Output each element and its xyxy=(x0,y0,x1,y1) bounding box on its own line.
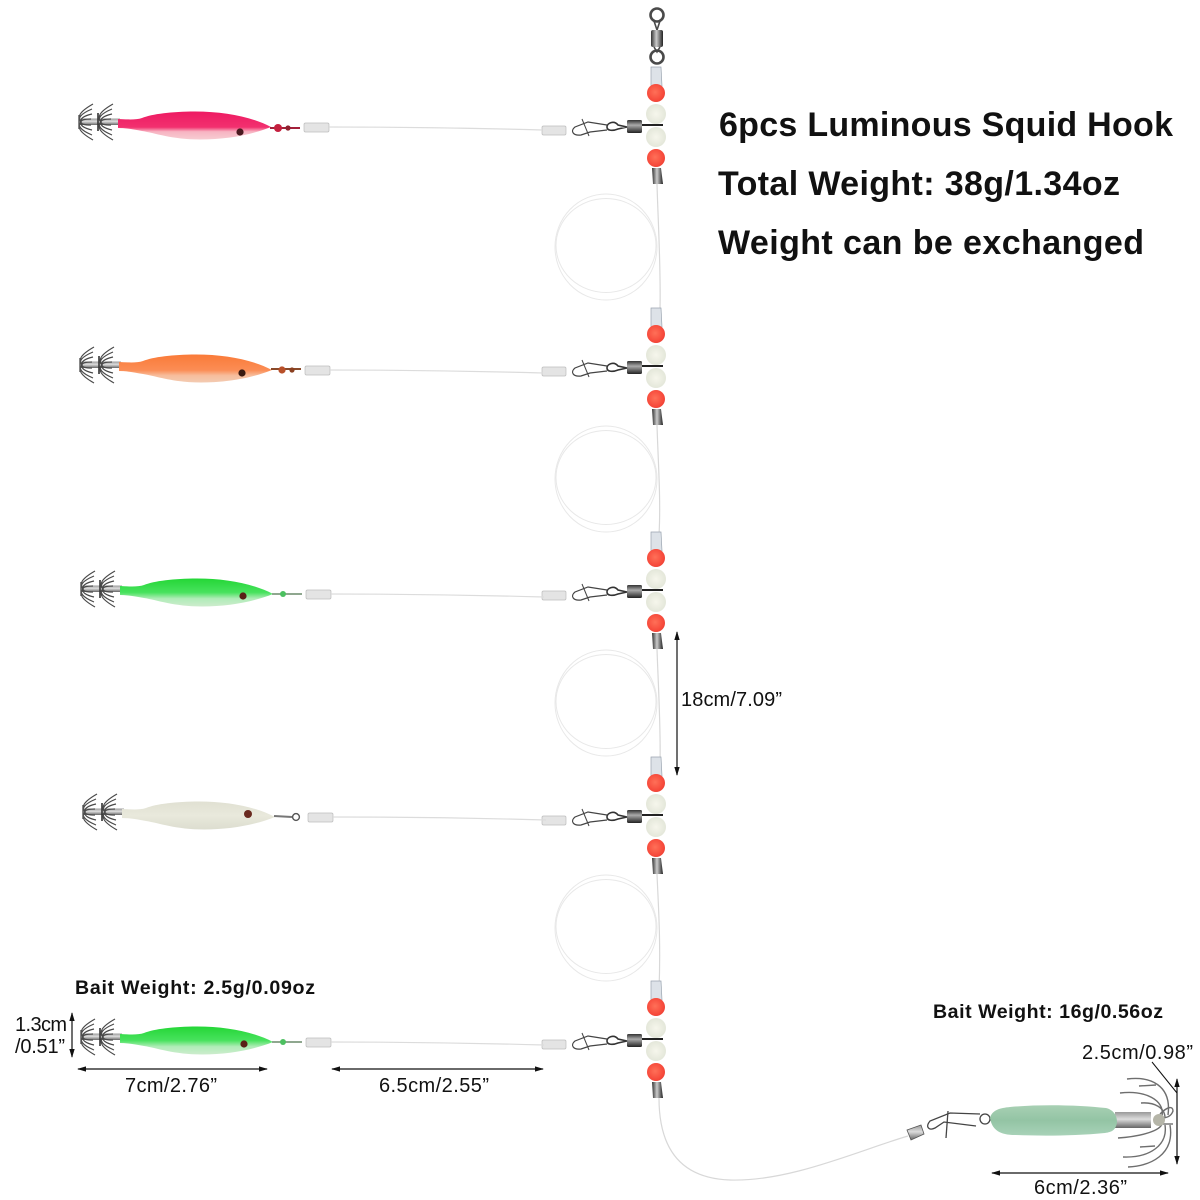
lure: green with dimensions xyxy=(81,1019,544,1055)
rig node 4 xyxy=(542,757,666,874)
dimension: 2.5cm xyxy=(1082,1042,1193,1164)
heading: total weight: Total Weight: 38g/1.34oz xyxy=(718,165,1120,203)
lure: green xyxy=(81,571,544,607)
coiled line 2 xyxy=(555,426,657,532)
snap xyxy=(928,1111,990,1138)
dimension: 6.5cm: 6.5cm/2.55” xyxy=(379,1075,489,1097)
label: bait weight large: Bait Weight: 16g/0.56oz xyxy=(933,1001,1163,1023)
dimension: 1.3cm: /0.51” xyxy=(15,1036,65,1058)
jig hook hub xyxy=(1153,1114,1165,1126)
coiled line 4 xyxy=(555,875,657,981)
lure: pink xyxy=(79,104,542,140)
dimension: 18cm: 18cm/7.09” xyxy=(681,689,782,711)
top swivel xyxy=(650,8,664,64)
dimension: 6cm: 6cm/2.36” xyxy=(1034,1177,1127,1199)
main line xyxy=(657,184,908,1180)
rig node 1 xyxy=(542,67,666,184)
crimp xyxy=(907,1125,924,1140)
dimension: 2.5cm: 2.5cm/0.98” xyxy=(1082,1042,1193,1064)
rig node 2 xyxy=(542,308,666,425)
dimension: 1.3cm xyxy=(15,1013,72,1058)
jig body xyxy=(990,1105,1117,1136)
coiled line 1 xyxy=(555,194,657,300)
dimension: 7cm: 7cm/2.76” xyxy=(125,1075,217,1097)
heading: exchange note: Weight can be exchanged xyxy=(718,224,1144,262)
lure: glow white xyxy=(83,794,546,830)
dimension: 1.3cm: 1.3cm xyxy=(15,1014,67,1036)
rig node 5 xyxy=(542,981,666,1098)
coiled line 3 xyxy=(555,650,657,756)
lure: orange xyxy=(80,347,543,383)
jig hooks xyxy=(1118,1078,1173,1167)
large luminous jig xyxy=(907,1078,1173,1167)
heading: product name: 6pcs Luminous Squid Hook xyxy=(719,106,1173,144)
jig shank xyxy=(1115,1112,1151,1128)
label: bait weight small: Bait Weight: 2.5g/0.09oz xyxy=(75,977,315,999)
title text block xyxy=(718,106,1173,262)
rig node 3 xyxy=(542,532,666,649)
